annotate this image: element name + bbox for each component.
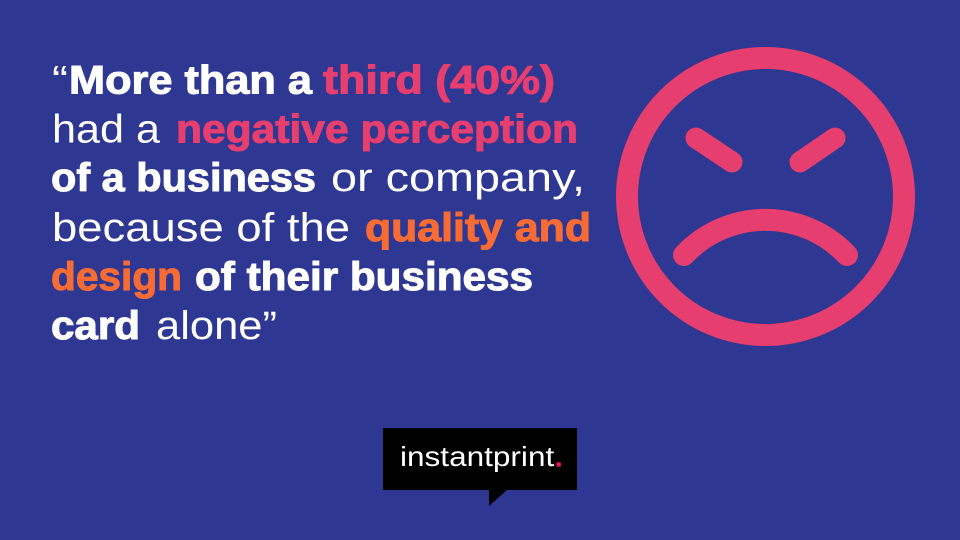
quote line 5: design: [51, 255, 182, 299]
quote line 4: because of the: [52, 206, 350, 250]
quote line 4: quality and: [365, 206, 591, 250]
quote line 2: had a: [52, 108, 160, 152]
logo bubble: [383, 428, 577, 506]
quote line 2: negative perception: [176, 108, 578, 152]
quote line 1: [52, 58, 555, 102]
quote line 6: [51, 304, 277, 348]
frowning mouth: [684, 220, 847, 255]
right eyebrow: [800, 138, 835, 162]
quote line 3: [51, 156, 585, 200]
quote text block: [51, 58, 591, 348]
quote line 5: of their business: [195, 255, 533, 299]
quote line 1: More than a: [69, 58, 313, 102]
quote line 4: [52, 206, 591, 250]
left eyebrow: [696, 138, 732, 162]
face outline: [627, 58, 904, 335]
quote line 5: [51, 255, 533, 299]
logo: instantprint speech bubble: [383, 428, 577, 506]
quote line 1: third (40%): [323, 58, 555, 102]
quote line 6: card: [51, 304, 140, 348]
quote line 3: or company,: [331, 156, 585, 200]
quote line 6: alone”: [156, 304, 277, 348]
icon: angry face: [627, 58, 904, 335]
quote line 1: “: [52, 58, 68, 102]
logo wordmark: instantprint .: [400, 441, 563, 472]
quote line 3: of a business: [51, 156, 316, 200]
